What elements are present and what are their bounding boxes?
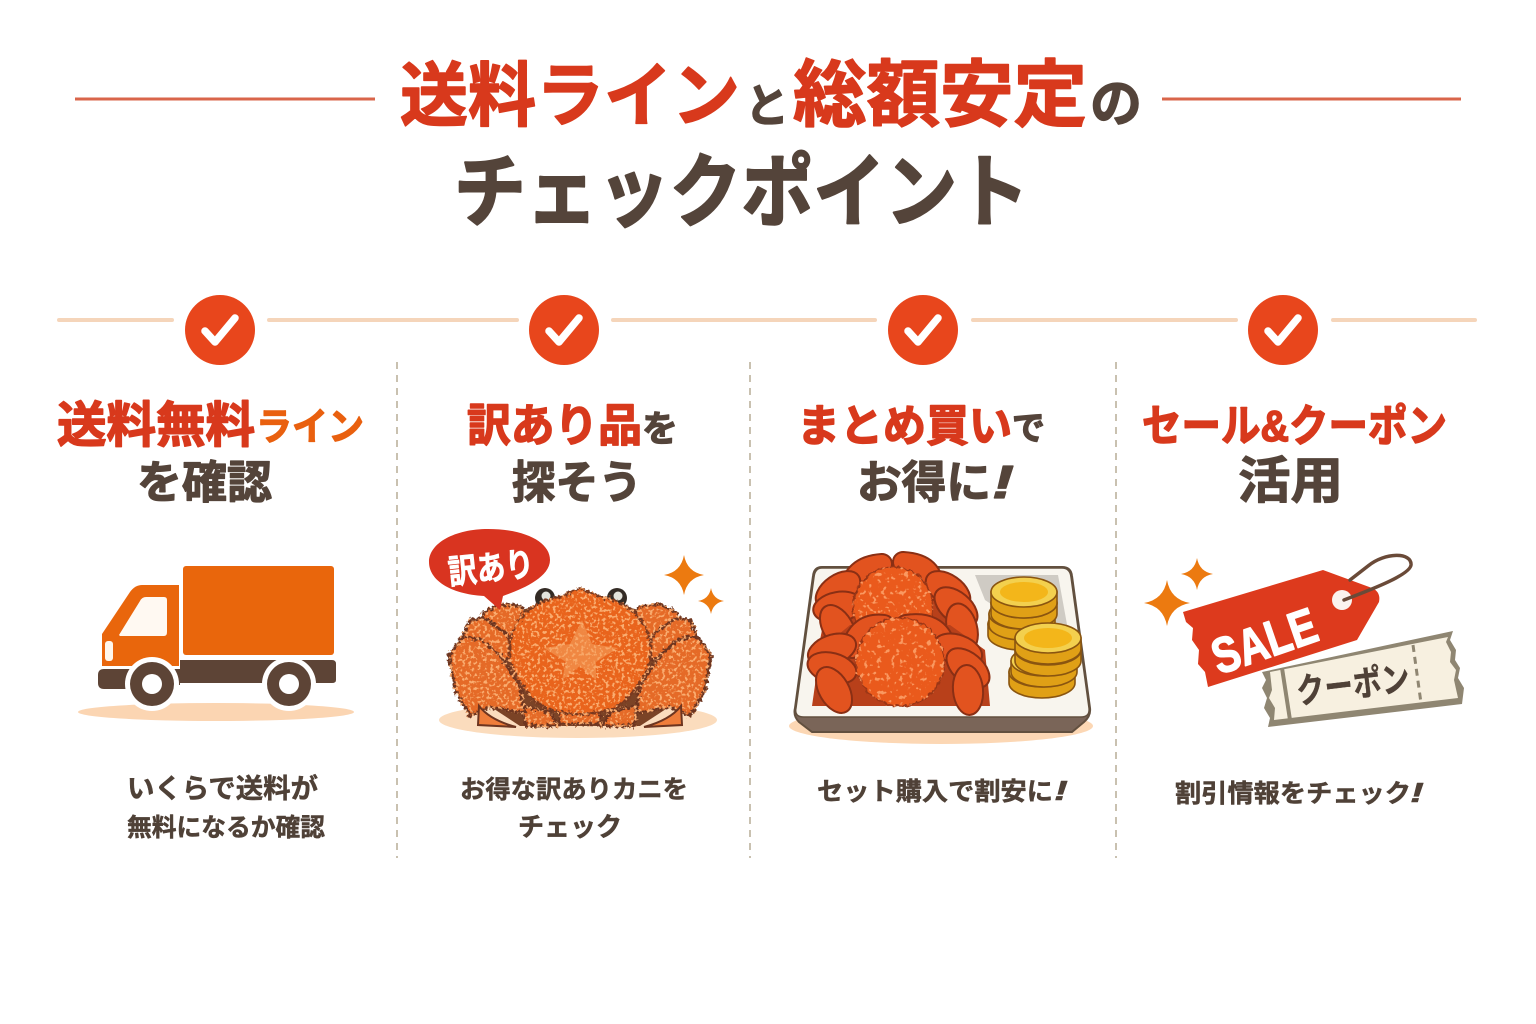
crab legs [449,600,711,727]
description 1: 無料になるか確認 [127,814,325,842]
title line 1: 総額安定 [793,55,1087,136]
description 2 [460,776,688,842]
back crab [809,560,985,657]
heading 3: お得に [857,457,991,508]
heading 1: 送料無料 [57,399,255,453]
icon: truck [78,566,354,721]
heading 1: ライン [256,407,364,449]
crabs [803,560,997,719]
description 1: いくらで送料が [127,773,318,804]
icon: check 4 [1248,295,1318,365]
heading 2: 訳あり品 [467,400,642,451]
icon: check 1 [185,295,255,365]
description 4: 割引情報をチェック [1175,780,1411,808]
speech bubble [429,529,550,610]
heading 3: ! [992,456,1014,508]
panel: bulk purchase [789,295,1093,806]
timeline connector [59,318,1475,322]
coupon [1262,631,1464,727]
title line 1: と [745,80,789,132]
title line 1: 送料ライン [400,57,740,135]
icon: sale tag and coupon [1144,555,1464,727]
heading 4: 活用 [1238,453,1343,509]
description 2: チェック [518,812,622,842]
heading 2: 探そう [512,457,642,508]
heading 3: で [1012,410,1045,448]
coins [988,577,1081,698]
icon: check 2 [529,295,599,365]
panel: sale and coupon [1142,295,1464,808]
title line 1: の [1090,76,1142,134]
heading 4: セール&クーポン [1142,402,1447,451]
title rule right [1162,98,1461,100]
description 3: セット購入で割安に [817,778,1053,806]
sale tag: SALE [1204,597,1325,685]
icon: crab with wakeari bubble [429,529,724,738]
heading 2: を [642,408,678,449]
title line 2: チェックポイント [454,148,1029,237]
sparkles [1144,558,1213,626]
heading 2 [467,400,678,508]
heading 4 [1142,402,1447,509]
icon: check 3 [888,295,958,365]
sparkles [664,555,724,614]
description 4: ! [1410,777,1424,808]
crab shell [509,588,651,714]
sale tag [1183,555,1411,687]
speech bubble: 訳あり [446,545,536,592]
heading 1 [57,399,364,508]
title [75,55,1461,237]
front crab [803,618,997,719]
tray [794,567,1090,732]
description 1 [127,773,325,842]
panel: free shipping line [57,295,364,842]
description 3: ! [1054,775,1068,806]
heading 3 [797,402,1045,508]
panel: discount items [429,295,724,842]
icon: tray of crabs and coins [789,560,1093,744]
coupon: クーポン [1294,659,1412,712]
heading 1: を確認 [137,457,272,508]
title rule left [75,98,375,100]
title line 1 [400,55,1142,136]
heading 3: まとめ買い [797,402,1012,451]
description 2: お得な訳ありカニを [460,776,688,804]
